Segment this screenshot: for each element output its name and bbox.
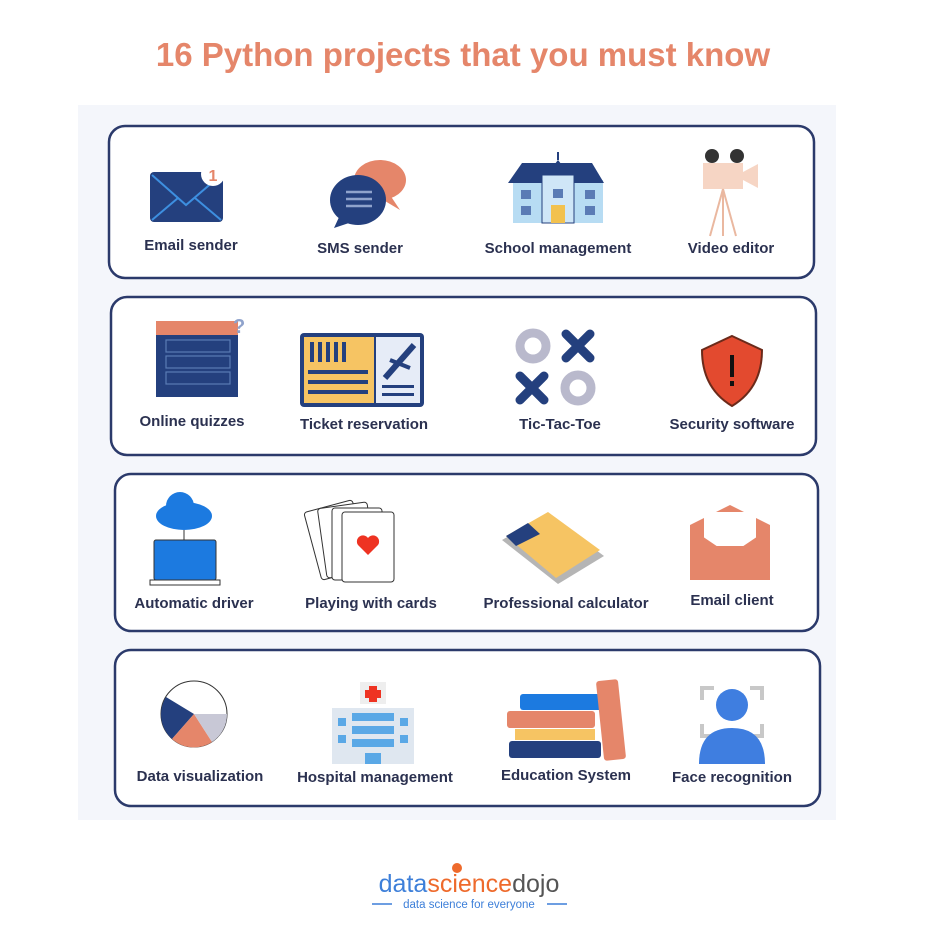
icon: automatic driver [150,492,220,585]
logo: datasciencedojo [379,870,559,898]
icon: calculator [502,512,604,584]
icon: books [507,679,626,761]
label: Email sender: Email sender [144,237,238,254]
title: 16 Python projects that you must know [156,36,770,73]
panel: row 3 [115,474,818,631]
panel: row 2 [111,297,816,455]
label: Playing with cards: Playing with cards [305,595,437,612]
label: Education System: Education System [501,767,631,784]
icon: email sender [150,162,225,222]
icon: tic-tac-toe [520,333,591,401]
logo: data science for everyone [403,899,535,911]
icon: playing cards [304,500,394,582]
label: SMS sender: SMS sender [317,240,403,257]
icon: video editor [703,149,758,236]
icon: online quizzes [156,316,245,397]
label: Hospital management: Hospital management [297,769,453,786]
label: Tic-Tac-Toe: Tic-Tac-Toe [519,416,601,433]
icon: hospital [332,682,414,764]
label: Professional calculator: Professional calculator [483,595,649,612]
panel: row 4 [115,650,820,806]
label: Video editor: Video editor [688,240,774,257]
label: Email client: Email client [690,592,774,609]
icon: pie chart [161,681,227,747]
icon: sms sender [330,160,406,228]
label: Data visualization: Data visualization [137,768,263,785]
icon: online quizzes: ? [233,316,245,338]
label: School management: School management [485,240,631,257]
panel: row 1 [109,126,814,278]
icon: email client [690,505,770,580]
logo [372,863,567,911]
label: Security software: Security software [669,416,795,433]
icon: email sender: 1 [209,168,218,185]
icon: shield [702,336,762,406]
label: Face recognition: Face recognition [672,769,792,786]
label: Automatic driver: Automatic driver [134,595,254,612]
label: Ticket reservation: Ticket reservation [300,416,428,433]
label: Online quizzes: Online quizzes [139,413,245,430]
icon: ticket [300,333,424,407]
icon: school [508,152,604,223]
icon: face recognition [699,688,765,764]
